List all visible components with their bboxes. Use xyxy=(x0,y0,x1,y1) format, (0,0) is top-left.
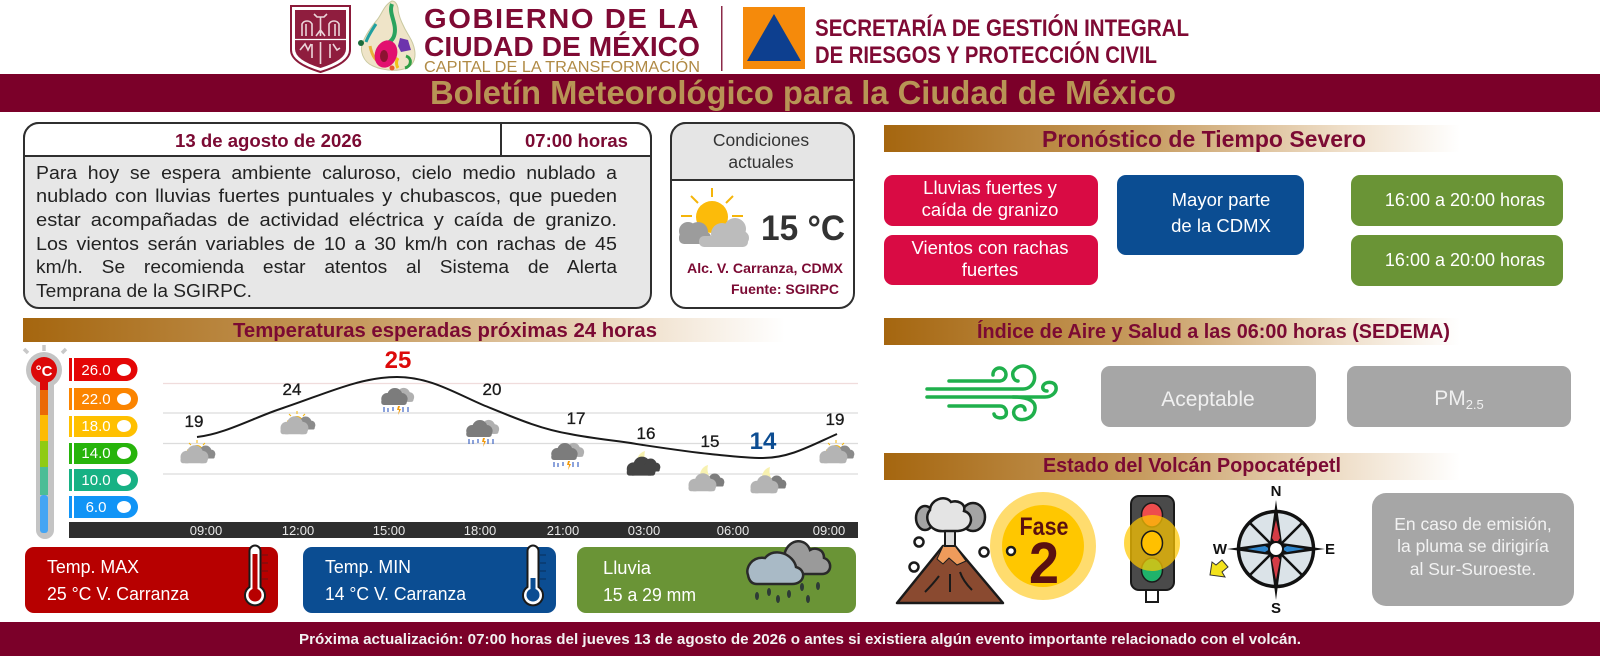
forecast paragraph: Temprana de la SGIRPC. xyxy=(36,280,252,301)
time axis: 12:00 xyxy=(282,523,314,538)
footer band xyxy=(0,622,1600,656)
heading: volcano: Estado del Volcán Popocatépetl xyxy=(1043,455,1341,477)
card: strong winds: fuertes xyxy=(962,259,1018,280)
card: maximum temperature xyxy=(25,546,278,613)
legend item 6: 6.0 xyxy=(86,499,106,516)
time axis xyxy=(69,522,858,538)
temperature values: 15 xyxy=(701,432,719,451)
card: minimum temperature xyxy=(303,546,556,613)
panel: current conditions xyxy=(671,123,854,308)
card: rain: 15 a 29 mm xyxy=(603,585,696,605)
icon: plume direction arrow xyxy=(1210,560,1228,577)
icon: city coat of arms xyxy=(291,6,350,72)
time axis: 06:00 xyxy=(717,523,749,538)
time axis: 09:00 xyxy=(190,523,222,538)
card: wind schedule: 16:00 a 20:00 horas xyxy=(1385,250,1545,270)
icon: traffic light xyxy=(1124,496,1180,602)
card: strong winds: Vientos con rachas xyxy=(911,237,1069,258)
date: 13 de agosto de 2026 xyxy=(175,131,362,151)
legend item 22 xyxy=(69,388,138,410)
heading: severe weather xyxy=(884,125,1460,152)
phase badge: 2 xyxy=(1029,531,1059,596)
phase badge xyxy=(990,492,1096,600)
card: heavy rain and hail: Lluvias fuertes y xyxy=(923,177,1058,198)
title band xyxy=(0,74,1600,112)
heading: Gobierno de la Ciudad de México: CAPITAL DE LA TRANSFORMACIÓN xyxy=(424,59,700,76)
legend item 10 xyxy=(69,469,138,491)
heading: Secretaría: DE RIESGOS Y PROTECCIÓN CIVIL xyxy=(815,41,1157,69)
card: heavy rain and hail: caída de granizo xyxy=(922,199,1058,220)
forecast paragraph: Los vientos serán variables de 10 a 30 km/h con rachas de 45 xyxy=(36,233,617,254)
icon: civil protection xyxy=(743,7,805,69)
card: minimum temperature: Temp. MIN xyxy=(325,557,411,577)
heading: severe weather: Pronóstico de Tiempo Severo xyxy=(1042,126,1366,152)
legend item 18: 18.0 xyxy=(81,418,111,435)
status: air quality xyxy=(1101,366,1316,427)
card: area: Mayor parte xyxy=(1172,189,1270,210)
icon: compass: N xyxy=(1271,483,1281,500)
heading: temperatures: Temperaturas esperadas próximas 24 horas xyxy=(233,320,657,342)
heading: air quality: Índice de Aire y Salud a las 06:00 horas (SEDEMA) xyxy=(977,320,1450,343)
time axis: 09:00 xyxy=(813,523,845,538)
icon: cold thermometer xyxy=(523,546,546,605)
legend item 10: 10.0 xyxy=(81,472,111,489)
status: pollutant: 2.5 xyxy=(1466,397,1484,412)
heading: Gobierno de la Ciudad de México: CIUDAD DE MÉXICO xyxy=(424,31,700,62)
forecast paragraph: Para hoy se espera ambiente caluroso, cielo medio nublado a xyxy=(36,162,618,183)
icon: compass: W xyxy=(1213,541,1228,558)
heading: Gobierno de la Ciudad de México: GOBIERNO DE LA xyxy=(424,3,700,34)
card: rain: Lluvia xyxy=(603,558,652,578)
panel: current conditions: actuales xyxy=(728,152,794,172)
callout: plume direction: al Sur-Suroeste. xyxy=(1410,559,1536,579)
card: rain xyxy=(577,541,856,613)
weather icons xyxy=(180,388,854,493)
panel: forecast text xyxy=(24,123,651,308)
icon: volcano xyxy=(897,498,1003,603)
footer band: Próxima actualización: 07:00 horas del jueves 13 de agosto de 2026 o antes si existiera algún evento importante relacionado con el volcán. xyxy=(299,632,1301,648)
time axis: 03:00 xyxy=(628,523,660,538)
temperature values: 19 xyxy=(826,410,844,429)
maximum value: 25 xyxy=(385,347,411,374)
current temperature: 15 °C xyxy=(761,209,845,248)
card: wind schedule xyxy=(1351,235,1563,286)
source: Fuente: SGIRPC xyxy=(731,281,839,297)
callout: plume direction: la pluma se dirigiría xyxy=(1397,536,1549,556)
phase badge: Fase xyxy=(1020,513,1069,541)
time axis: 18:00 xyxy=(464,523,496,538)
status: pollutant: PM xyxy=(1434,387,1466,410)
hour: 07:00 horas xyxy=(525,131,628,151)
card: area xyxy=(1117,175,1304,255)
legend item 26 xyxy=(69,358,138,381)
icon: thermometer scale xyxy=(24,345,66,539)
card: area: de la CDMX xyxy=(1171,215,1271,236)
title band: Boletín Meteorológico para la Ciudad de México xyxy=(430,74,1176,111)
card: maximum temperature: Temp. MAX xyxy=(47,557,139,577)
forecast paragraph: estar acompañadas de actividad eléctrica y caída de granizo. xyxy=(36,209,617,230)
icon: hot thermometer xyxy=(245,546,268,605)
forecast paragraph: nublado con lluvias fuertes puntuales y chubascos, que pueden xyxy=(36,185,617,206)
card: minimum temperature: 14 °C V. Carranza xyxy=(325,584,467,604)
time axis: 15:00 xyxy=(373,523,405,538)
legend: temperature ranges xyxy=(69,358,138,518)
callout: plume direction: En caso de emisión, xyxy=(1394,514,1552,534)
line: temperature curve xyxy=(197,377,837,458)
legend item 14 xyxy=(69,443,138,464)
location: Alc. V. Carranza, CDMX xyxy=(687,260,844,276)
icon: rain clouds xyxy=(747,541,830,603)
chart: 24 hour temperature xyxy=(69,347,858,538)
temperature values: 19 xyxy=(185,412,203,431)
forecast paragraph: km/h. Se recomienda estar atentos al Sistema de Alerta xyxy=(36,256,618,277)
icon: thermometer scale: °C xyxy=(36,363,53,380)
legend item 14: 14.0 xyxy=(81,445,111,462)
temperature values: 24 xyxy=(283,380,301,399)
temperature values: 20 xyxy=(483,380,501,399)
card: rain schedule: 16:00 a 20:00 horas xyxy=(1385,190,1545,210)
icon: compass xyxy=(1213,483,1335,617)
legend item 18 xyxy=(69,416,138,437)
legend item 26: 26.0 xyxy=(81,362,111,379)
card: rain schedule xyxy=(1351,175,1563,226)
status: pollutant xyxy=(1347,366,1571,427)
heading: Secretaría xyxy=(815,14,1189,69)
temperature values: 16 xyxy=(637,424,655,443)
callout: plume direction xyxy=(1372,493,1574,606)
panel: severe weather cards xyxy=(884,175,1563,286)
heading: temperatures xyxy=(23,318,785,342)
forecast paragraph xyxy=(36,162,618,301)
minimum value: 14 xyxy=(750,428,777,455)
temperature values xyxy=(185,380,844,451)
card: heavy rain and hail xyxy=(884,175,1098,226)
legend item 6 xyxy=(69,496,138,518)
heading: air quality xyxy=(884,318,1460,345)
icon: sun and clouds xyxy=(679,188,749,247)
heading: Gobierno de la Ciudad de México xyxy=(424,3,700,76)
heading: Secretaría: SECRETARÍA DE GESTIÓN INTEGRAL xyxy=(815,14,1189,42)
icon: wind xyxy=(927,366,1056,420)
time axis: 21:00 xyxy=(547,523,579,538)
icon: compass: E xyxy=(1325,541,1335,558)
heading: volcano xyxy=(884,453,1460,480)
card: maximum temperature: 25 °C V. Carranza xyxy=(47,584,190,604)
icon: compass: S xyxy=(1271,600,1281,617)
temperature values: 17 xyxy=(567,409,585,428)
panel: current conditions: Condiciones xyxy=(713,130,809,150)
status: air quality: Aceptable xyxy=(1161,388,1255,411)
card: strong winds xyxy=(884,235,1098,285)
icon: colourful logo xyxy=(358,1,415,71)
legend item 22: 22.0 xyxy=(81,391,111,408)
header logos xyxy=(291,1,1189,76)
